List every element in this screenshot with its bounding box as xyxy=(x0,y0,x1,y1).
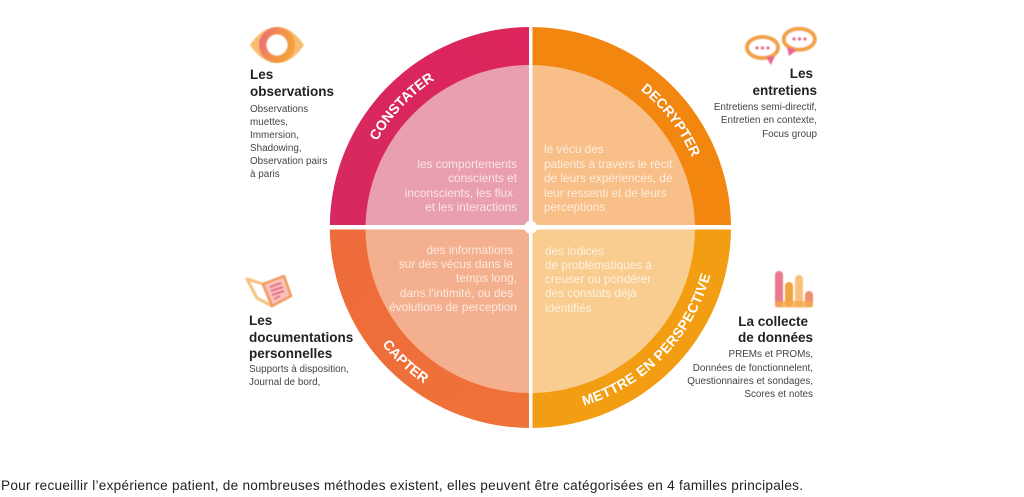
text block: mettre en perspective description: des constats déjà xyxy=(545,286,637,300)
list: Données de fonctionnelent, xyxy=(693,363,813,374)
block: les documentations personnelles xyxy=(249,313,353,388)
text block: capter description: dans l'intimité, ou des xyxy=(400,286,513,300)
text block: mettre en perspective description: creuser ou pondérer xyxy=(545,272,651,286)
list: Supports à disposition, xyxy=(249,364,349,375)
heading: entretiens xyxy=(752,83,817,98)
list: Shadowing, xyxy=(250,143,302,154)
list: Observations xyxy=(250,104,308,115)
text block: decrypter description: leur ressenti et de leurs xyxy=(544,186,667,200)
text block: decrypter description: de leurs expériences, de xyxy=(544,171,673,185)
ring label: decrypter: DECRYPTER xyxy=(641,83,700,158)
text block: decrypter description: patients à travers le récit xyxy=(544,157,673,171)
text block: capter description: des informations xyxy=(426,243,513,257)
text block: capter description: sur des vécus dans le xyxy=(399,257,513,271)
icon: eye xyxy=(250,27,304,63)
list: Immersion, xyxy=(250,130,299,141)
ring label: mettre en perspective: METTRE EN PERSPECTIVE xyxy=(582,273,710,406)
caption: Pour recueillir l’expérience patient, de nombreuses méthodes existent, elles peuvent être catégorisées en 4 familles principales. xyxy=(1,478,803,493)
text block: decrypter description: perceptions xyxy=(544,200,605,214)
icon: open book xyxy=(247,276,291,306)
quadrant: constater xyxy=(330,27,529,225)
text block: constater description xyxy=(405,157,518,214)
quadrant: decrypter xyxy=(532,27,731,225)
text block: decrypter description xyxy=(544,142,673,214)
text block: mettre en perspective description: de problématiques à xyxy=(545,258,652,272)
text block: mettre en perspective description: identifiés xyxy=(545,301,592,315)
icon: bar chart xyxy=(775,271,813,308)
heading: La collecte xyxy=(738,314,808,329)
text block: constater description: inconscients, les flux xyxy=(405,186,513,200)
list: muettes, xyxy=(250,117,288,128)
list: PREMs et PROMs, xyxy=(728,349,813,360)
panel: wheel xyxy=(330,27,731,428)
text block: constater description: conscients et xyxy=(448,171,518,185)
list: Entretiens semi-directif, xyxy=(714,102,817,113)
text block: mettre en perspective description xyxy=(545,244,652,315)
heading: Les xyxy=(250,67,273,82)
list: Scores et notes xyxy=(744,389,813,400)
icon: speech bubbles xyxy=(747,29,815,65)
list: à paris xyxy=(250,169,280,180)
center dot xyxy=(524,221,537,234)
text block: constater description: et les interactions xyxy=(425,200,517,214)
quadrant: capter xyxy=(330,230,529,428)
heading: observations xyxy=(250,84,334,99)
text block: capter description: temps long, xyxy=(456,271,517,285)
text block: capter description: évolutions de perception xyxy=(389,300,517,314)
ring label: constater: CONSTATER xyxy=(370,73,434,140)
block: les observations xyxy=(250,67,334,180)
heading: Les xyxy=(249,313,272,328)
quadrant: mettre en perspective xyxy=(532,230,731,428)
block: la collecte de données xyxy=(687,314,813,400)
list: Focus group xyxy=(762,129,817,140)
list: Observation pairs xyxy=(250,156,327,167)
list: Entretien en contexte, xyxy=(721,115,817,126)
text block: mettre en perspective description: des indices xyxy=(545,244,604,258)
text block: constater description: les comportements xyxy=(417,157,517,171)
heading: documentations xyxy=(249,330,353,345)
heading: Les xyxy=(790,66,813,81)
text block: decrypter description: le vécu des xyxy=(544,142,604,156)
list: Questionnaires et sondages, xyxy=(687,376,813,387)
heading: personnelles xyxy=(249,346,332,361)
heading: de données xyxy=(738,330,813,345)
block: les entretiens xyxy=(714,66,817,140)
list: Journal de bord, xyxy=(249,377,320,388)
text block: capter description xyxy=(389,243,517,314)
ring label: capter: CAPTER xyxy=(384,340,428,384)
